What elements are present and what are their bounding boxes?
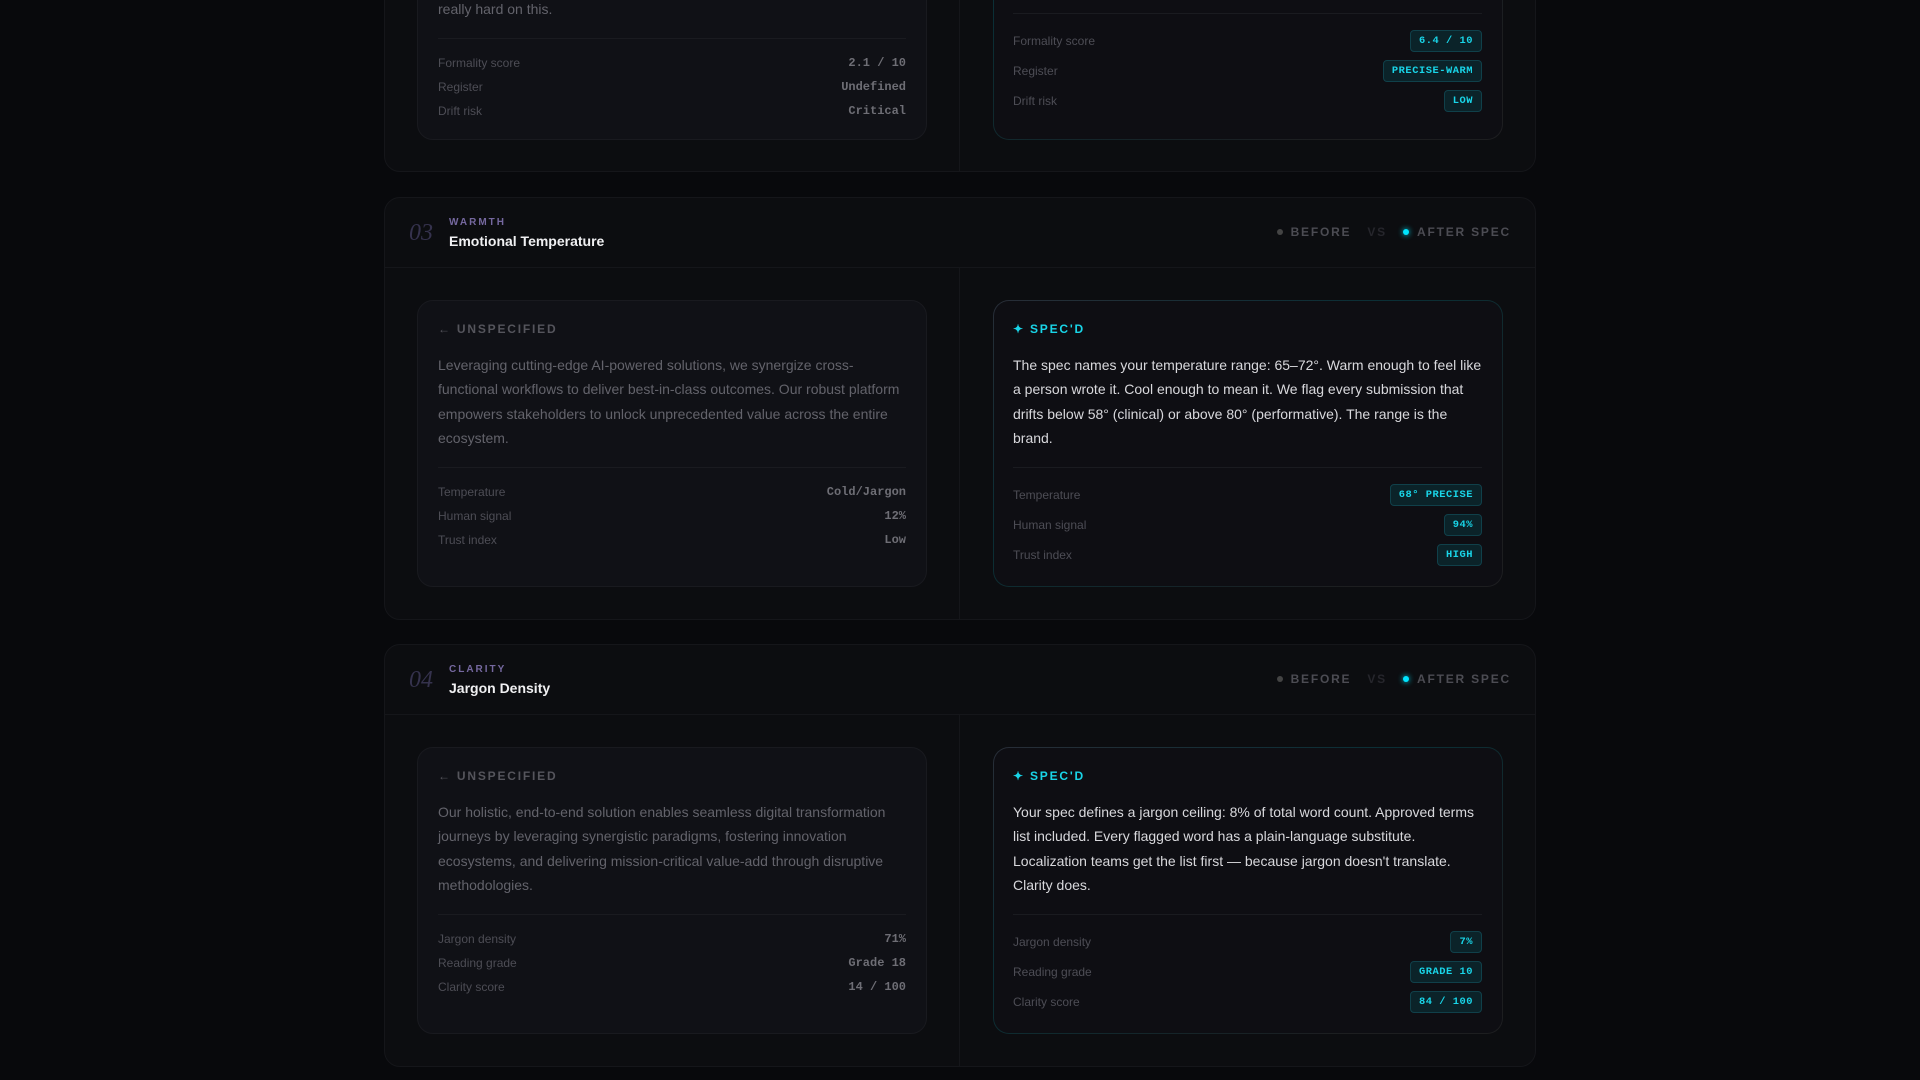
number: 04 <box>409 667 433 693</box>
metrics: PRECISE-WARM <box>1392 65 1473 77</box>
text block: really hard on this. <box>438 0 552 16</box>
metrics: Human signal <box>1013 518 1086 532</box>
metrics: 12% <box>884 509 906 523</box>
legend: VS <box>1367 672 1387 686</box>
header <box>385 645 1535 715</box>
text block: Our holistic, end-to-end solution enables seamless digital transformation journeys by leveraging synergistic paradigms, fostering innovation ecosystems, and delivering mission-critical value-add through disruptive methodologies. <box>438 804 885 893</box>
panel: unspecified 04 <box>417 747 927 1034</box>
text block: The spec names your temperature range: 65–72°. Warm enough to feel like a person wrote it. Cool enough to mean it. We flag every submission that drifts below 58° (clinical) or above 80° (performative). The range is the brand. <box>1013 357 1481 446</box>
legend: BEFORE AFTER SPEC <box>1291 225 1511 239</box>
metrics: 84 / 100 <box>1419 996 1473 1008</box>
metrics: Critical <box>848 104 906 118</box>
metrics <box>1013 467 1482 566</box>
header <box>385 198 1535 268</box>
metrics: Trust index <box>438 533 497 547</box>
metrics: Undefined <box>841 80 906 94</box>
number: 03 <box>409 220 433 246</box>
panel: unspecified 02 <box>417 0 927 140</box>
metrics: Clarity score <box>438 980 505 994</box>
metrics <box>438 38 906 119</box>
metrics: Reading grade <box>1013 965 1092 979</box>
metrics: Register <box>438 80 483 94</box>
panel: section 04 <box>384 644 1536 1067</box>
eyebrow: WARMTH <box>449 217 506 228</box>
metrics: LOW <box>1453 95 1473 107</box>
eyebrow: CLARITY <box>449 664 506 675</box>
metrics: Formality score <box>438 56 520 70</box>
metrics: 68° PRECISE <box>1399 489 1473 501</box>
heading: Jargon Density <box>449 680 550 696</box>
text block: Leveraging cutting-edge AI-powered solutions, we synergize cross-functional workflows to deliver best-in-class outcomes. Our robust platform empowers stakeholders to unlock unprecedented value across the entire ecosystem. <box>438 357 899 446</box>
metrics: HIGH <box>1446 549 1473 561</box>
panel: spec'd 04 <box>993 747 1503 1034</box>
metrics: GRADE 10 <box>1419 966 1473 978</box>
metrics: 94% <box>1453 519 1473 531</box>
metrics: 6.4 / 10 <box>1419 35 1473 47</box>
metrics: Clarity score <box>1013 995 1080 1009</box>
metrics: Register <box>1013 64 1058 78</box>
metrics: Human signal <box>438 509 511 523</box>
metrics: Cold/Jargon <box>827 485 906 499</box>
metrics: Formality score <box>1013 34 1095 48</box>
legend: BEFORE AFTER SPEC <box>1291 672 1511 686</box>
metrics: Trust index <box>1013 548 1072 562</box>
metrics: Drift risk <box>1013 94 1057 108</box>
metrics <box>438 467 906 548</box>
label: ← UNSPECIFIED <box>438 322 557 336</box>
panel: section 02 (clipped at top) <box>384 0 1536 172</box>
metrics <box>1013 13 1482 112</box>
label: ✦ SPEC'D <box>1013 769 1085 783</box>
metrics: Grade 18 <box>848 956 906 970</box>
label: ← UNSPECIFIED <box>438 769 557 783</box>
panel: spec'd 02 <box>993 0 1503 140</box>
metrics: 2.1 / 10 <box>848 56 906 70</box>
metrics: 14 / 100 <box>848 980 906 994</box>
metrics: Drift risk <box>438 104 482 118</box>
metrics: Low <box>884 533 906 547</box>
metrics <box>438 914 906 995</box>
metrics: Jargon density <box>438 932 516 946</box>
metrics: Jargon density <box>1013 935 1091 949</box>
panel: section 03 <box>384 197 1536 620</box>
metrics: 71% <box>884 932 906 946</box>
metrics: 7% <box>1459 936 1473 948</box>
metrics: Reading grade <box>438 956 517 970</box>
metrics: Temperature <box>438 485 505 499</box>
legend: VS <box>1367 225 1387 239</box>
text block: Your spec defines a jargon ceiling: 8% of total word count. Approved terms list included. Every flagged word has a plain-language substitute. Localization teams get the list first — because jargon doesn't translate. Clarity does. <box>1013 804 1474 893</box>
metrics: Temperature <box>1013 488 1080 502</box>
panel: unspecified 03 <box>417 300 927 587</box>
heading: Emotional Temperature <box>449 233 604 249</box>
panel: spec'd 03 <box>993 300 1503 587</box>
label: ✦ SPEC'D <box>1013 322 1085 336</box>
metrics <box>1013 914 1482 1013</box>
